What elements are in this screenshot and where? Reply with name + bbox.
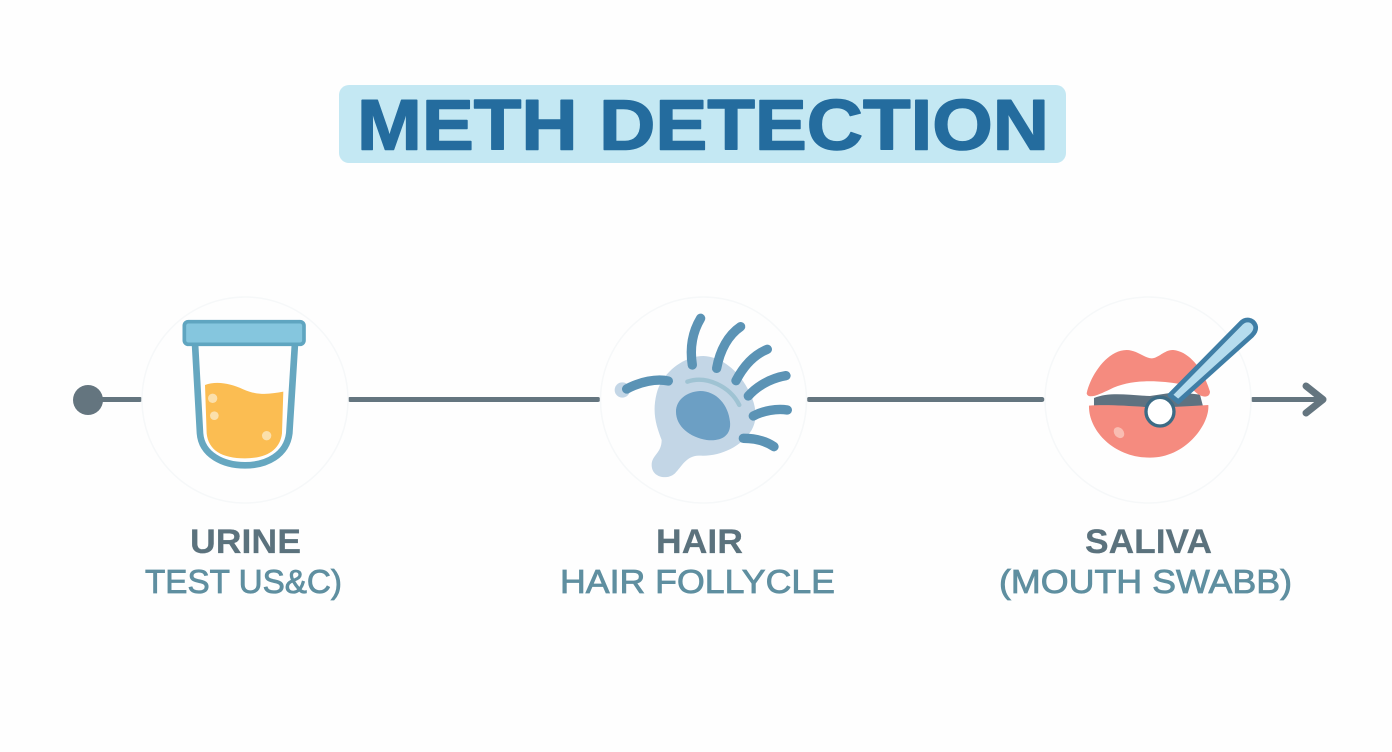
icon: lips with swab [1087, 320, 1256, 458]
panel: urine test [142, 297, 348, 600]
connector: hair to saliva [809, 397, 1042, 402]
urine subheading: TEST US&C) [145, 563, 342, 600]
connector: urine to hair [350, 397, 598, 402]
saliva subheading: (MOUTH SWABB) [999, 563, 1292, 600]
saliva icon circle [1045, 297, 1251, 503]
hair heading: HAIR [656, 523, 743, 561]
urine heading: URINE [190, 523, 301, 561]
title text: METH DETECTION [357, 86, 1049, 165]
saliva heading: SALIVA [1085, 523, 1212, 561]
end arrow [1253, 386, 1323, 413]
panel: saliva test [999, 297, 1292, 600]
timeline start dot [73, 385, 140, 415]
panel: hair test [560, 297, 835, 600]
icon: hair follicle [615, 318, 787, 477]
title banner [339, 85, 1066, 165]
hair icon circle [600, 297, 806, 503]
urine icon circle [142, 297, 348, 503]
icon: urine cup [184, 322, 304, 465]
hair subheading: HAIR FOLLYCLE [560, 563, 835, 600]
